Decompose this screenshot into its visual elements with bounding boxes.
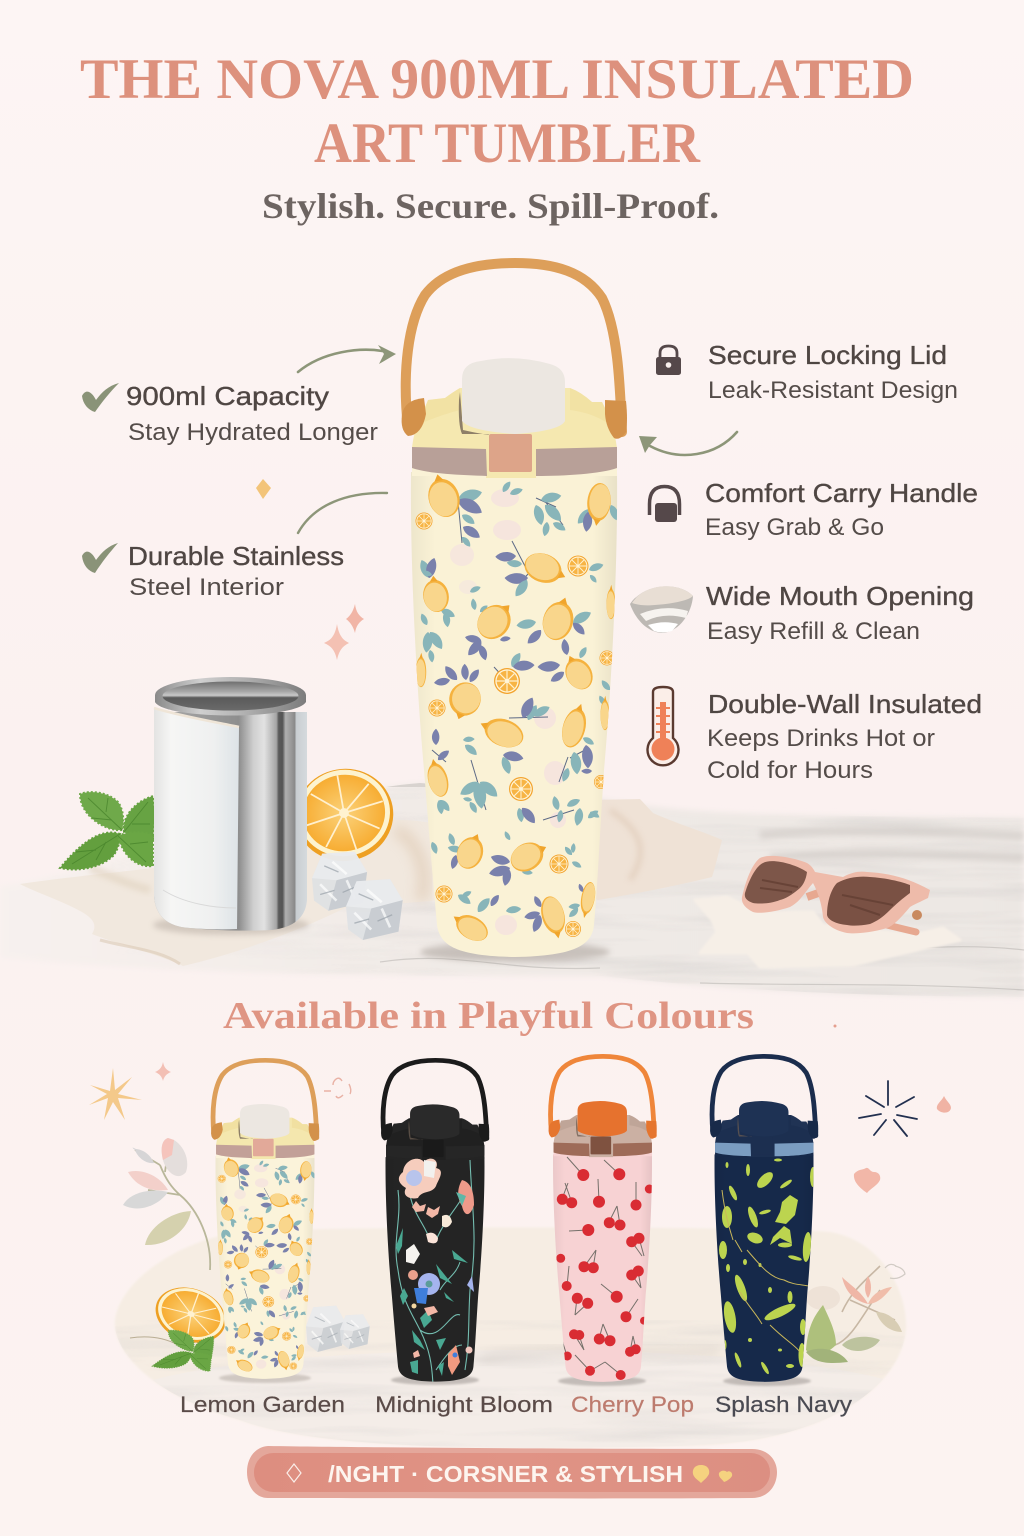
- feature: durable stainless: Steel Interior: [129, 574, 284, 601]
- stainless steel inner cup: [153, 677, 309, 935]
- feature: wide mouth opening: Wide Mouth Opening: [706, 581, 974, 611]
- mint leaves: [60, 792, 154, 870]
- sunglasses on towel: [695, 856, 960, 967]
- towel: [695, 897, 960, 967]
- tumbler: Cherry Pop: [549, 1056, 657, 1386]
- feature: comfort carry handle: Easy Grab & Go: [705, 514, 884, 541]
- decorative gold star: [89, 1068, 142, 1120]
- decorative gold gem: [256, 479, 271, 499]
- floral sprig left: [123, 1138, 210, 1270]
- icon: wide mouth: [630, 586, 693, 633]
- icon: check mark: [82, 383, 119, 412]
- arrow to lid: [639, 432, 737, 455]
- decorative pink drop: [937, 1096, 951, 1113]
- arrow to handle: [298, 345, 396, 372]
- ice cubes: [312, 852, 403, 940]
- marble table surface: [142, 783, 1024, 997]
- decorative pink sparkle: [155, 1062, 171, 1081]
- feature: double-wall insulated: Cold for Hours: [707, 757, 873, 784]
- feature: secure locking lid: Leak-Resistant Design: [708, 377, 958, 404]
- feature: durable stainless: [82, 541, 344, 601]
- feature: wide mouth opening: Easy Refill & Clean: [707, 618, 920, 645]
- feature: double-wall insulated: [648, 687, 982, 784]
- title: THE NOVA 900ML INSULATED: [80, 48, 914, 111]
- icon: handle: [650, 486, 680, 522]
- tumbler: Lemon Garden: [211, 1060, 319, 1383]
- feature: comfort carry handle: Comfort Carry Handle: [705, 478, 978, 508]
- decorative pink heart: [854, 1168, 880, 1193]
- feature: 900ml capacity: 900ml Capacity: [126, 381, 329, 411]
- feature: double-wall insulated: Double-Wall Insulated: [708, 689, 982, 719]
- arrow to interior: [298, 493, 387, 533]
- feature: 900ml capacity: Stay Hydrated Longer: [128, 419, 378, 446]
- small pink dot: [834, 1024, 836, 1028]
- feature: wide mouth opening: [630, 581, 974, 645]
- title: ART TUMBLER: [314, 112, 701, 175]
- cloth under cup: [20, 820, 440, 966]
- icon: lock: [656, 346, 681, 375]
- lemon half small: [148, 1278, 233, 1352]
- colour name labels: Cherry Pop: [571, 1392, 694, 1417]
- feature: 900ml capacity: [82, 381, 378, 446]
- colour name labels: Lemon Garden: [180, 1392, 345, 1417]
- decorative navy starburst: [859, 1081, 917, 1136]
- lower marble platform: [115, 1228, 920, 1450]
- feature: comfort carry handle: [650, 478, 978, 541]
- subtitle: Stylish. Secure. Spill-Proof.: [262, 186, 719, 226]
- tumbler: Splash Navy: [710, 1056, 818, 1386]
- bottom banner: [247, 1446, 777, 1498]
- decorative dashed flourish: [324, 1078, 351, 1098]
- main tumbler: lemon print: [402, 263, 627, 962]
- bottom banner: /NGHT · CORSNER & STYLISH: [328, 1461, 683, 1487]
- colour name labels: [180, 1392, 852, 1417]
- feature: double-wall insulated: Keeps Drinks Hot or: [707, 725, 935, 752]
- colour name labels: Splash Navy: [715, 1392, 852, 1417]
- icon: check mark: [82, 543, 118, 573]
- lemon half: [288, 761, 401, 869]
- feature: secure locking lid: [656, 340, 958, 404]
- cloth behind tumbler: [590, 799, 722, 900]
- heading: available colours: Available in Playful Colours: [223, 995, 754, 1037]
- feature: secure locking lid: Secure Locking Lid: [708, 340, 947, 370]
- banner right gold icons: [693, 1465, 732, 1483]
- mint sprig small: [130, 1328, 214, 1373]
- icon: thermometer: [648, 687, 678, 765]
- decorative pink sparkles: [324, 604, 364, 660]
- colour name labels: Midnight Bloom: [375, 1392, 553, 1417]
- plant decoration right: [806, 1264, 905, 1363]
- banner left diamond icon: [287, 1464, 301, 1482]
- feature: durable stainless: Durable Stainless: [128, 541, 344, 571]
- tumbler: Midnight Bloom: [381, 1060, 489, 1385]
- title: [80, 48, 914, 175]
- ice cubes small: [306, 1306, 370, 1352]
